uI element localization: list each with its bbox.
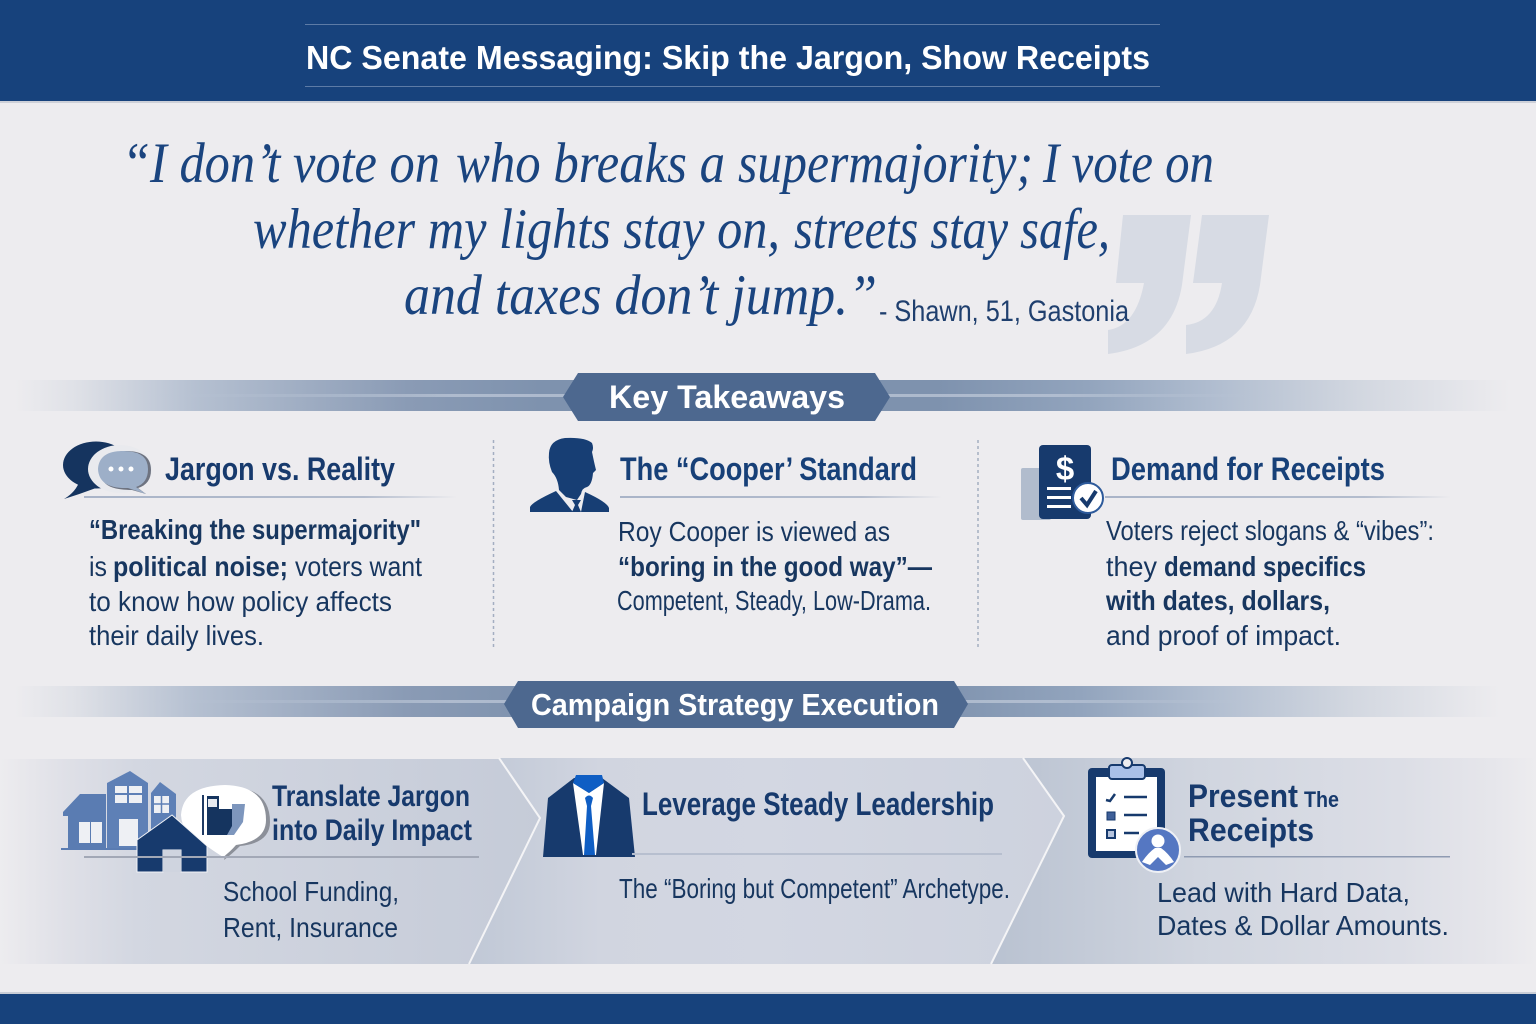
body text: their daily lives. bbox=[89, 620, 264, 651]
body text: voters want bbox=[295, 551, 422, 582]
body text: Dates & Dollar Amounts. bbox=[1157, 910, 1449, 941]
icon: receipt with check bbox=[1021, 445, 1103, 520]
icon: clipboard with person badge bbox=[1088, 758, 1180, 872]
heading: Jargon vs. Reality bbox=[165, 451, 395, 487]
footer bar bbox=[0, 992, 1536, 1024]
quote: “I don’t vote on bbox=[122, 132, 440, 195]
header banner bbox=[0, 0, 1536, 103]
panel: strategy chevrons background bbox=[0, 758, 1536, 964]
panel: translate jargon bbox=[61, 771, 479, 943]
heading: Receipts bbox=[1188, 812, 1314, 848]
quote: streets stay safe, bbox=[794, 198, 1110, 261]
heading: Demand for Receipts bbox=[1111, 451, 1385, 487]
heading: Present bbox=[1188, 778, 1298, 814]
body text: Competent, Steady, Low-Drama. bbox=[617, 585, 931, 616]
body text: The “Boring but Competent” Archetype. bbox=[619, 873, 1010, 904]
heading: Translate Jargon bbox=[272, 780, 470, 813]
column dividers bbox=[492, 440, 494, 650]
body text: and proof of impact. bbox=[1106, 620, 1341, 651]
panel: jargon vs reality bbox=[63, 442, 457, 651]
section header: key takeaways: Key Takeaways bbox=[609, 379, 845, 415]
quote: who breaks a bbox=[456, 132, 725, 195]
section header: campaign strategy execution bbox=[0, 681, 1500, 728]
icon: speech bubbles bbox=[63, 442, 152, 499]
body text: demand specifics bbox=[1164, 551, 1366, 582]
body text bbox=[1105, 515, 1434, 651]
panel: cooper standard bbox=[530, 438, 942, 616]
body text bbox=[223, 876, 399, 943]
body text: with dates, dollars, bbox=[1105, 585, 1330, 616]
attribution: - Shawn, 51, Gastonia bbox=[879, 295, 1129, 328]
body text bbox=[89, 514, 422, 651]
icon: large closing quote mark bbox=[1108, 215, 1269, 354]
title: NC Senate Messaging: Skip the Jargon, Show Receipts bbox=[306, 39, 1150, 76]
heading: into Daily Impact bbox=[272, 814, 472, 847]
body text: political noise; bbox=[113, 551, 288, 582]
body text: Roy Cooper is viewed as bbox=[618, 516, 890, 547]
icon: receipt with check: $ bbox=[1056, 450, 1074, 487]
body text: Lead with Hard Data, bbox=[1157, 877, 1410, 908]
section header: campaign strategy execution: Campaign Strategy Execution bbox=[531, 687, 939, 722]
body text: School Funding, bbox=[223, 876, 399, 907]
body text bbox=[1157, 877, 1449, 941]
panel: demand for receipts bbox=[1021, 445, 1451, 651]
body text: Voters reject slogans & “vibes”: bbox=[1106, 515, 1434, 546]
icon: houses with speech bubble bbox=[61, 771, 270, 872]
heading: Leverage Steady Leadership bbox=[642, 786, 994, 822]
heading bbox=[272, 780, 472, 847]
body text bbox=[617, 516, 932, 616]
body text: is bbox=[89, 551, 107, 582]
quote: whether my lights stay on, bbox=[253, 198, 780, 261]
body text: they bbox=[1106, 551, 1157, 582]
heading bbox=[1188, 778, 1339, 848]
body text: “boring in the good way”— bbox=[618, 551, 932, 582]
heading: The “Cooper’ Standard bbox=[620, 451, 917, 487]
panel: present the receipts bbox=[1088, 758, 1450, 941]
quote bbox=[122, 132, 1214, 328]
section header: key takeaways bbox=[0, 373, 1510, 421]
body text: to know how policy affects bbox=[89, 586, 392, 617]
heading: The bbox=[1304, 787, 1339, 812]
icon: suit and tie bbox=[543, 775, 635, 857]
body text: Rent, Insurance bbox=[223, 912, 398, 943]
icon: person silhouette bbox=[530, 438, 609, 512]
quote: and taxes don’t jump.” bbox=[404, 264, 877, 327]
quote: I vote on bbox=[1042, 132, 1214, 195]
panel: leverage steady leadership bbox=[543, 775, 1010, 904]
quote: supermajority; bbox=[738, 132, 1033, 195]
body text: “Breaking the supermajority" bbox=[89, 514, 421, 545]
